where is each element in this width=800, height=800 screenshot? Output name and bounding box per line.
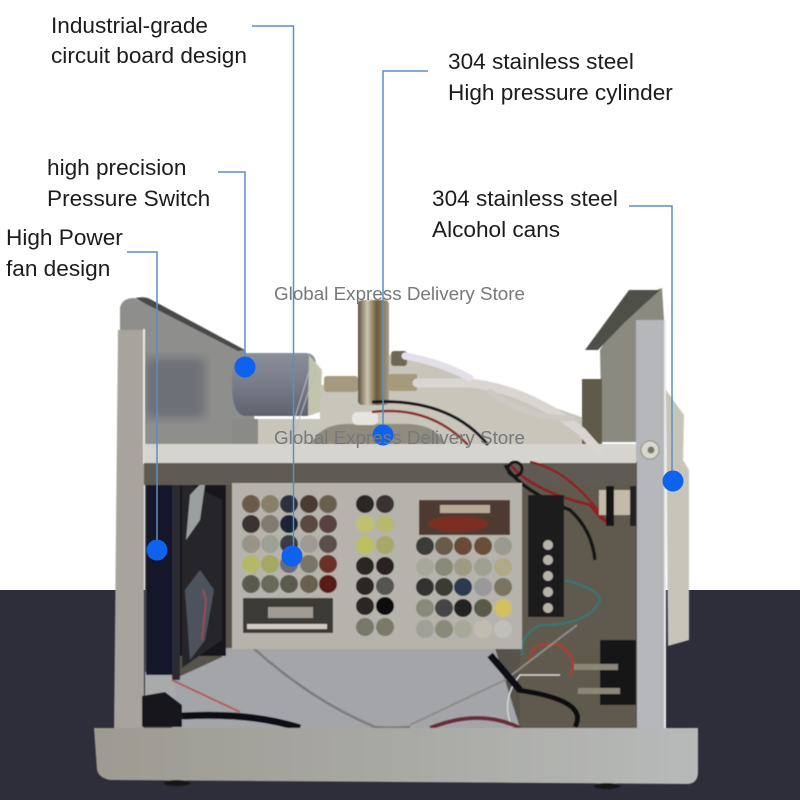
callout: circuit board	[51, 13, 302, 566]
pressure switch motor	[232, 353, 322, 440]
left post	[114, 330, 144, 730]
light panel under fan	[145, 672, 175, 698]
callout: pressure switch	[47, 155, 256, 378]
power supply box	[232, 483, 522, 649]
callout: high pressure cylinder	[372, 49, 673, 446]
callout: alcohol cans	[432, 186, 684, 492]
bottom-left connector	[142, 692, 182, 727]
callout: fan: High Power	[6, 225, 123, 250]
cables below shelf	[172, 462, 608, 728]
silicone tubes	[405, 356, 598, 450]
callout: circuit board: circuit board design	[51, 43, 247, 68]
foam floor	[172, 648, 520, 728]
connectors and fuse parts at right	[574, 486, 636, 705]
callout: circuit board: Industrial-grade	[51, 13, 208, 38]
callout: high pressure cylinder: 304 stainless steel	[448, 49, 634, 74]
PSU window bottom left	[243, 598, 333, 633]
PSU middle hole group	[356, 495, 394, 636]
right upright panel and bracket	[582, 288, 666, 730]
watermark top: Global Express Delivery Store	[274, 284, 525, 304]
shelf bolt	[641, 441, 659, 459]
callout: high pressure cylinder: High pressure cylinder	[448, 80, 673, 105]
callout: alcohol cans: 304 stainless steel	[432, 186, 618, 211]
black and red cables above shelf	[372, 402, 488, 445]
callout: pressure switch: high precision	[47, 155, 186, 180]
watermark shelf: Global Express Delivery Store	[274, 428, 525, 448]
interior cavity	[145, 462, 637, 728]
dark lower background band	[0, 590, 800, 800]
shelf	[144, 444, 636, 463]
callout: fan	[6, 225, 168, 560]
PSU window top right	[419, 500, 510, 535]
callout: pressure switch: Pressure Switch	[47, 186, 210, 211]
right interior wall	[520, 465, 636, 728]
photo: machine chassis	[94, 288, 698, 789]
PSU right hole group	[416, 537, 512, 638]
back wall behind top shelf	[257, 355, 590, 445]
base feet	[164, 780, 620, 789]
PSU left hole group	[242, 495, 337, 593]
fan	[146, 470, 226, 680]
base tray	[94, 728, 698, 784]
terminal block	[528, 495, 564, 617]
alcohol can at right	[666, 390, 689, 646]
callout: alcohol cans: Alcohol cans	[432, 217, 560, 242]
high pressure cylinder	[311, 300, 444, 444]
callout: fan: fan design	[6, 256, 110, 281]
left side panel	[120, 297, 258, 445]
